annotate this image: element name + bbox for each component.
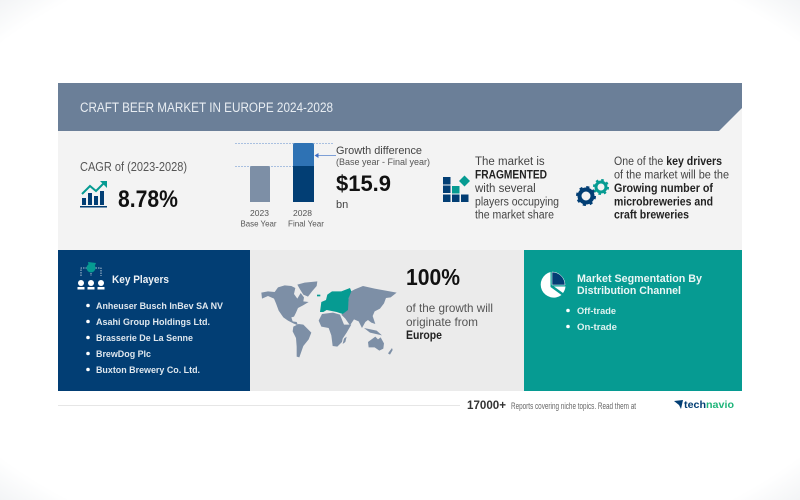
list: key players: Asahi Group Holdings Ltd. <box>96 317 210 327</box>
list: key players: BrewDog Plc <box>96 349 151 359</box>
stat: 100%: 100% <box>406 264 460 290</box>
text: growth origin: Europe <box>406 328 442 342</box>
axis labels: Base Year <box>240 218 277 228</box>
list: distribution channels: Off-trade <box>577 306 616 316</box>
bar chart: growth <box>235 143 336 228</box>
axis labels: 2023 <box>250 208 269 218</box>
growth difference text: Growth difference <box>336 145 422 157</box>
panel: summary background <box>58 105 742 250</box>
arrow: growth difference <box>314 153 336 158</box>
text: growth origin <box>406 301 493 342</box>
footer stat: 17000+ <box>467 400 506 412</box>
icon: fragmented blocks <box>443 176 470 202</box>
text: key driver: of the market will be the <box>614 170 729 182</box>
title banner <box>58 83 742 131</box>
list: key players: Buxton Brewery Co. Ltd. <box>96 365 200 375</box>
panel: regional growth <box>250 250 524 391</box>
CAGR label: CAGR of (2023-2028) <box>80 159 187 174</box>
text: growth origin: originate from <box>406 315 478 329</box>
text: key driver: craft breweries <box>614 210 689 222</box>
logo: technavio: technavio <box>684 399 734 411</box>
bar: 2028 increment <box>293 143 314 166</box>
heading: key players: Key Players <box>112 274 169 286</box>
heading: market segmentation: Market Segmentation By <box>577 273 703 285</box>
heading: market segmentation: Distribution Channel <box>577 285 681 297</box>
text: market fragmented <box>474 156 559 222</box>
axis labels: Final Year <box>288 218 324 228</box>
list: distribution channels: On-trade <box>577 322 617 332</box>
icon: pie chart <box>541 272 566 298</box>
title banner: CRAFT BEER MARKET IN EUROPE 2024-2028 <box>80 100 333 115</box>
icon: players network <box>78 262 104 290</box>
panel: key players <box>58 250 250 391</box>
list: distribution channels <box>566 306 617 332</box>
text: key driver <box>614 156 729 222</box>
panel: CAGR <box>80 159 187 213</box>
list: key players: Anheuser Busch InBev SA NV <box>96 301 223 311</box>
panel: market segmentation <box>524 250 742 391</box>
text: key driver: One of the key drivers <box>614 156 722 168</box>
icon: gears <box>578 180 608 204</box>
growth difference text: bn <box>336 199 348 211</box>
heading: market segmentation <box>577 273 703 297</box>
text: growth origin: of the growth will <box>406 301 493 315</box>
footer text: Reports covering niche topics. Read them at <box>511 401 636 411</box>
bar: 2028 base portion <box>293 166 314 202</box>
map accent: Iceland <box>317 295 320 296</box>
map highlight: Europe <box>320 288 351 314</box>
footer <box>58 399 734 412</box>
text: market fragmented: with several <box>474 183 536 195</box>
axis labels <box>240 208 324 228</box>
bar: 2023 base year <box>250 166 270 202</box>
text: market fragmented: FRAGMENTED <box>475 170 547 182</box>
growth difference text: $15.9 <box>336 171 391 196</box>
text: market fragmented: The market is <box>475 156 545 168</box>
world map <box>261 281 397 357</box>
text: market fragmented: the market share <box>475 210 554 222</box>
CAGR value: 8.78% <box>118 186 178 213</box>
list: key players <box>86 301 223 375</box>
axis labels: 2028 <box>293 208 312 218</box>
icon: growth chart <box>80 181 107 208</box>
text: market fragmented: players occupying <box>475 196 559 208</box>
growth difference text <box>336 145 430 211</box>
growth difference text: (Base year - Final year) <box>336 157 430 167</box>
text: key driver: Growing number of <box>614 183 713 195</box>
text: key driver: microbreweries and <box>614 196 713 208</box>
list: key players: Brasserie De La Senne <box>96 333 193 343</box>
